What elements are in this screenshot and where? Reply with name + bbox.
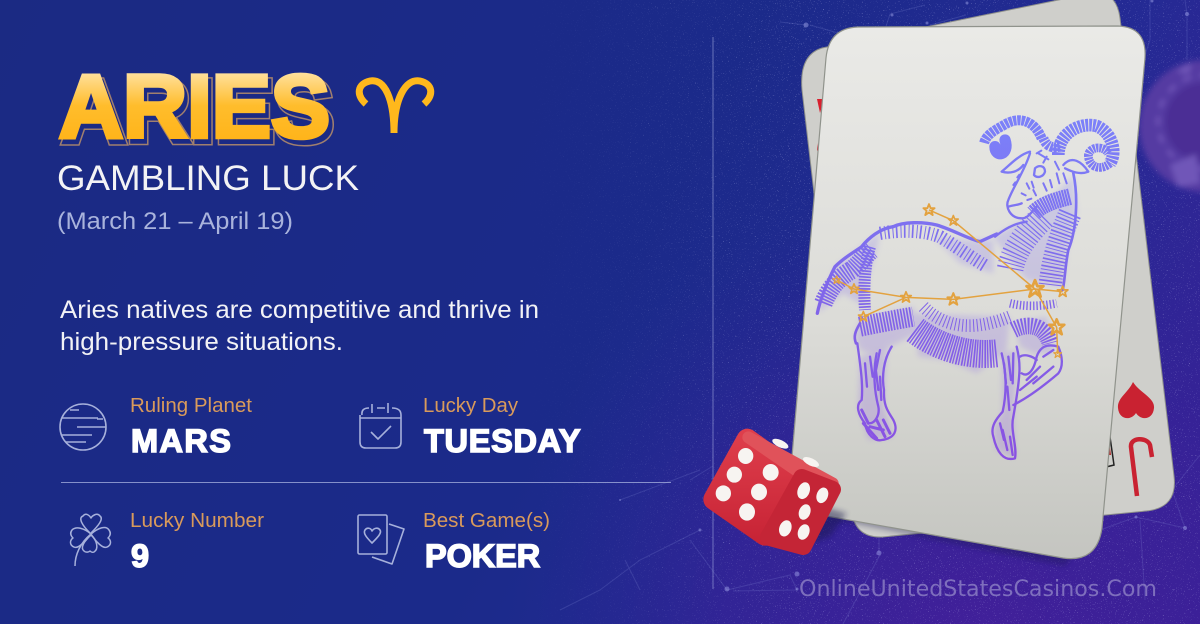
subtitle: GAMBLING LUCK [57,159,359,198]
icon: clover [70,514,110,566]
title: ARIES: ARIES [59,56,330,156]
stat: ruling planet [60,395,252,459]
stat: lucky number: Lucky Number [130,510,264,532]
stat: lucky number: 9 [131,538,149,574]
ram horns [984,120,1113,167]
stat: best game: Best Game(s) [423,510,550,532]
stat: best game: POKER [425,538,540,574]
date range: (March 21 – April 19) [57,208,293,235]
vertical divider [712,37,714,589]
court card frame [1106,430,1114,467]
stat: lucky number [70,510,264,574]
title: ARIES: ARIES [62,61,334,161]
ram rear legs [857,343,896,440]
constellation [833,204,1068,357]
back playing card [802,0,1174,537]
stat: ruling planet: Ruling Planet [130,395,252,417]
ram shaded areas [817,177,1077,458]
title: ARIES: ARIES [62,61,334,161]
icon: planet [60,404,106,450]
ram front legs [992,345,1062,459]
ram belly fur [855,303,1057,354]
icon: aries symbol [359,81,431,133]
poker chip [1139,60,1200,192]
stat: best game [358,510,550,574]
stat: lucky day: TUESDAY [424,423,581,459]
description [60,296,539,356]
watermark: OnlineUnitedStatesCasinos.Com [799,577,1157,602]
description: high-pressure situations. [60,328,343,356]
horizontal divider [61,482,671,484]
front playing card [790,26,1145,559]
ram illustration [817,120,1113,459]
description: Aries natives are competitive and thrive in [60,296,539,324]
stat: lucky day [360,395,581,459]
dice pips [716,437,830,541]
dice right face [768,477,833,547]
ram head [1002,151,1088,218]
stat: ruling planet: MARS [131,423,232,459]
icon: cards [358,515,404,564]
dice left face [714,439,797,535]
stat: lucky day: Lucky Day [423,395,518,417]
dice [714,437,847,547]
icon: calendar [360,403,401,448]
card shadow [825,500,1100,566]
letter J [1131,439,1152,496]
heart pip [1118,382,1154,418]
red pip marks on back card [817,99,824,152]
ram neck and mane [995,173,1076,290]
background [518,0,1200,624]
dice top face [748,437,833,483]
ram back and tail [817,223,997,313]
